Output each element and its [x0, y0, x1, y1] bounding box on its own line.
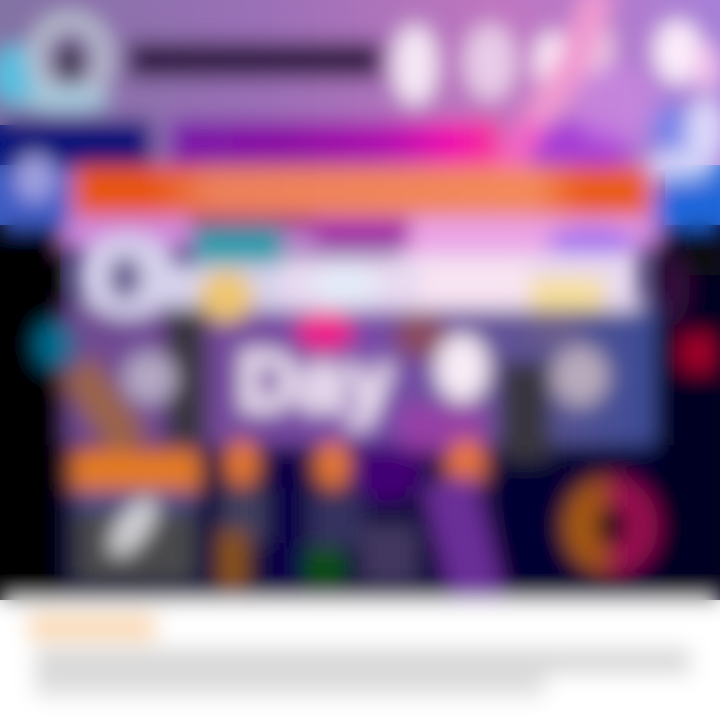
purple light beam — [448, 480, 480, 605]
grey card with pencil icon — [76, 490, 194, 582]
icon: pencil — [101, 491, 165, 563]
top right glowing shapes — [393, 20, 720, 105]
magenta band — [170, 65, 657, 176]
donut chart — [580, 492, 642, 560]
headline text block — [76, 234, 640, 322]
pink accent blob — [297, 311, 353, 351]
orange headline banner — [74, 166, 650, 216]
column cards — [218, 442, 421, 592]
crowd dark figures — [165, 308, 583, 462]
footer panel — [0, 600, 720, 720]
footer paragraph — [35, 648, 690, 696]
right silhouette — [654, 225, 720, 600]
brown diagonal figure — [76, 368, 132, 445]
big first word — [275, 254, 640, 310]
orange label bar — [72, 450, 200, 492]
teal accent left — [36, 321, 76, 369]
small grey blobs — [123, 346, 608, 406]
pink glow beneath banner — [190, 216, 640, 257]
left silhouette — [0, 225, 62, 600]
teal tag — [192, 228, 284, 264]
brand name bar — [128, 42, 382, 78]
navy band left — [0, 120, 152, 228]
pink light beam — [505, 0, 600, 175]
right lavender and blue glow — [648, 98, 720, 228]
orange column markers — [225, 439, 485, 491]
subtitle word: Day — [238, 334, 392, 428]
numeral — [436, 334, 488, 402]
footer heading — [28, 614, 156, 640]
logo: ring emblem with cyan glow — [0, 20, 110, 110]
